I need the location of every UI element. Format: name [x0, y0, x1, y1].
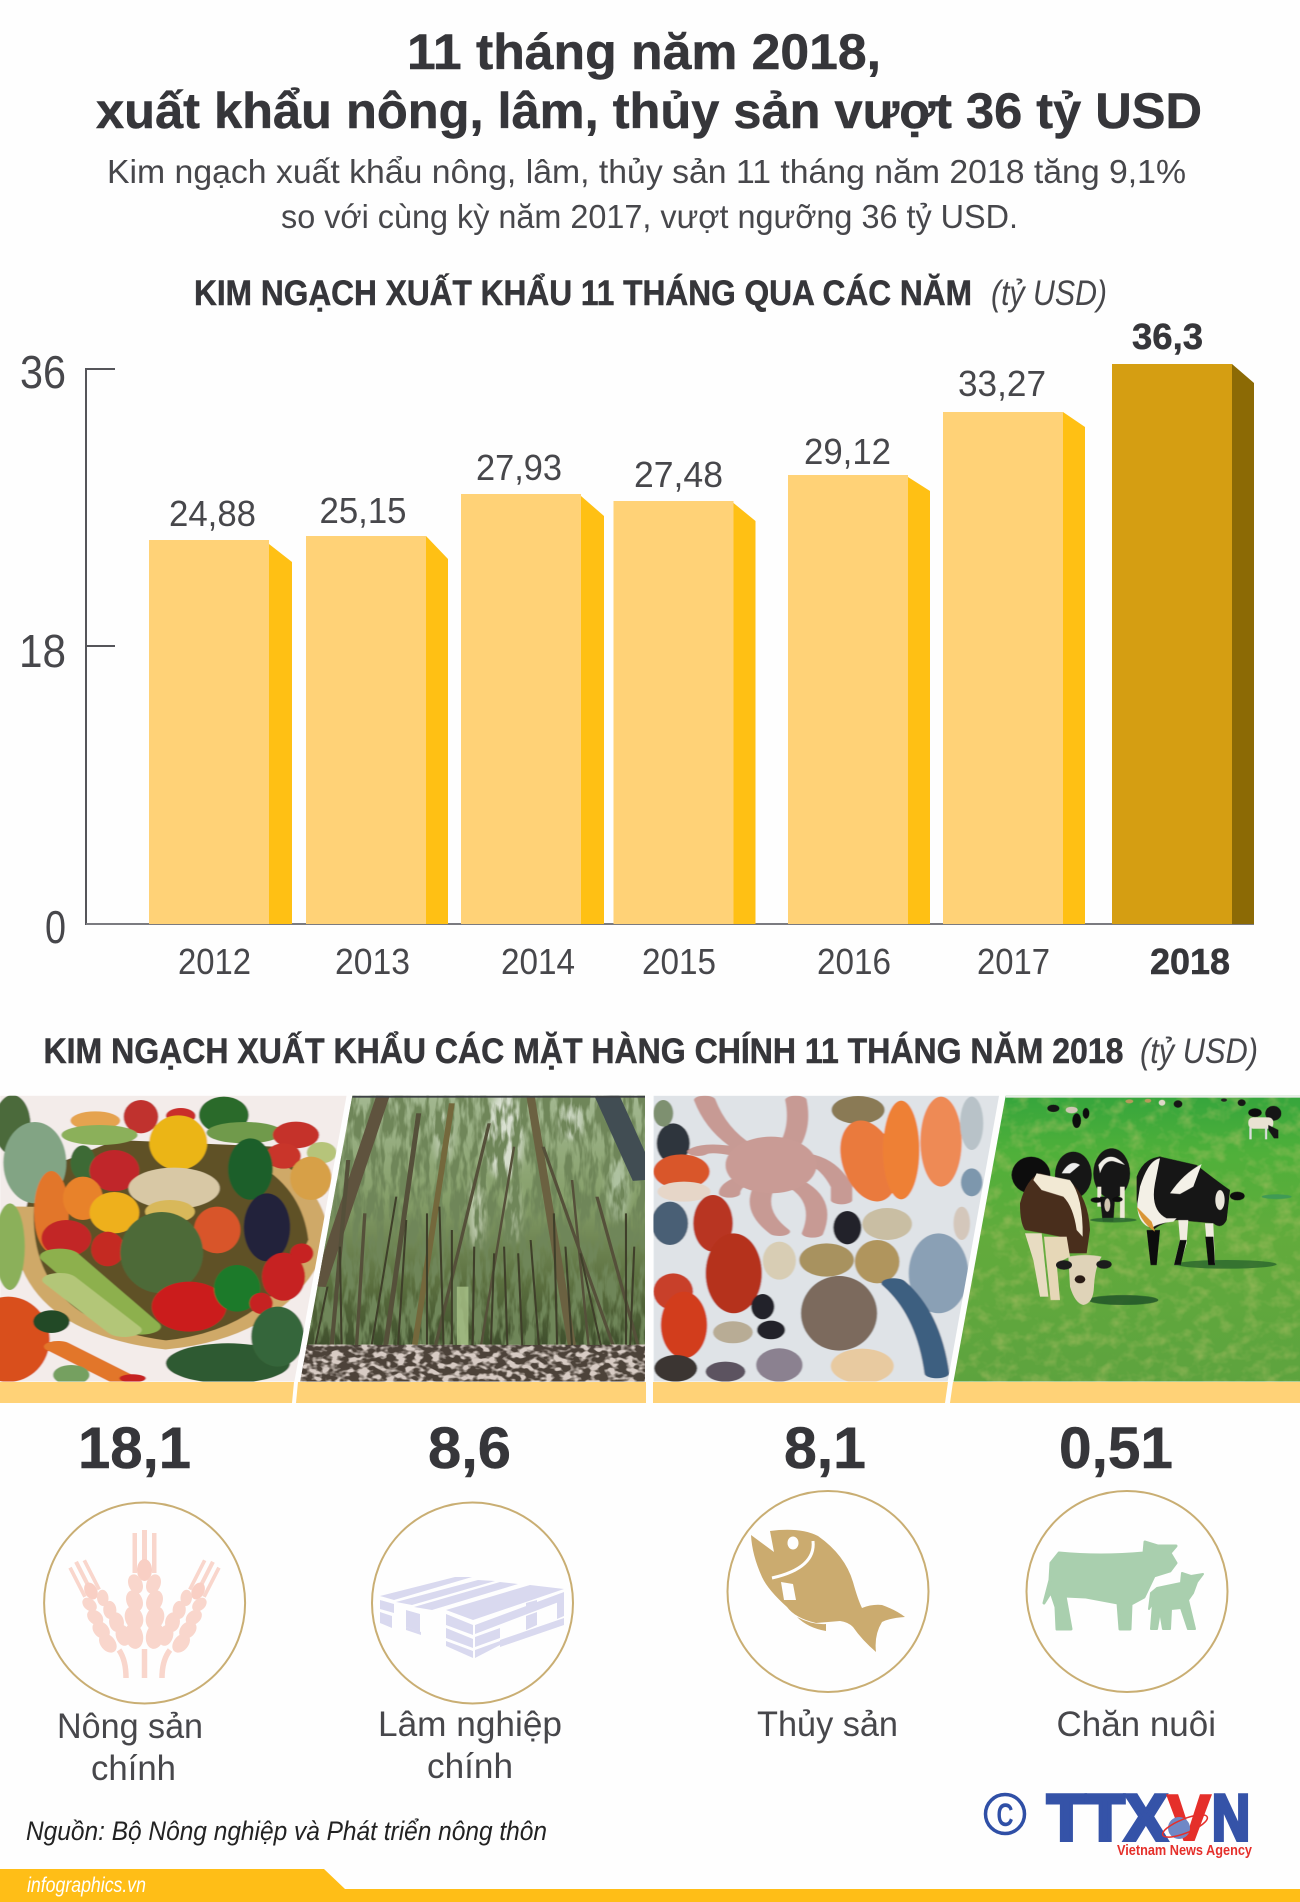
y axis with ticks and labels: 18: [19, 625, 66, 677]
bar 2016: 2016: [817, 941, 891, 982]
value: 8,6: 8,6: [428, 1416, 511, 1481]
subtitle: Kim ngạch xuất khẩu nông, lâm, thủy sản 11 tháng năm 2018 tăng 9,1%: [107, 153, 1186, 190]
y axis with ticks and labels: [19, 346, 115, 953]
yellow band under photos: [0, 1382, 1300, 1403]
value: 18,1: 18,1: [78, 1416, 191, 1481]
label: [378, 1705, 562, 1786]
label: Chăn nuôi: [1056, 1705, 1216, 1744]
column: agriculture: [44, 1416, 245, 1788]
bar 2013: 25,15: [320, 490, 406, 531]
bar 2012: 2012: [178, 941, 251, 982]
footer bar: [0, 1869, 1300, 1902]
value: 0,51: 0,51: [1059, 1416, 1173, 1481]
logo: TTXVN: TTX: [1047, 1781, 1167, 1854]
bar 2014: [461, 447, 604, 982]
footer bar: infographics.vn: [27, 1874, 146, 1897]
cow: brown and white, front: [1020, 1173, 1090, 1253]
bar 2014: 2014: [501, 941, 575, 982]
title: xuất khẩu nông, lâm, thủy sản vượt 36 tỷ USD: [96, 83, 1202, 139]
cow: black and white, middle: [1093, 1148, 1130, 1198]
bar 2018: 2018: [1150, 941, 1230, 982]
cow: big black and white: [1137, 1157, 1230, 1230]
y axis with ticks and labels: 36: [20, 346, 66, 398]
copyright mark: [986, 1794, 1024, 1834]
bar 2013: 2013: [335, 941, 410, 982]
column: livestock: [1026, 1416, 1228, 1744]
bar 2015: 2015: [642, 941, 716, 982]
heading: main export commodities: (tỷ USD): [1140, 1032, 1258, 1071]
subtitle: so với cùng kỳ năm 2017, vượt ngưỡng 36 tỷ USD.: [281, 198, 1018, 235]
icon: wheat in circle: [44, 1502, 245, 1704]
title: 11 tháng năm 2018,: [407, 24, 881, 80]
photo: forest: [298, 1093, 647, 1382]
photo: basket of vegetables: [0, 1095, 357, 1385]
label: [57, 1707, 203, 1788]
icon: fish in circle: [728, 1491, 928, 1692]
bar 2012: [149, 493, 292, 982]
far cows: [1047, 1105, 1059, 1112]
photo: cows on grass: [945, 1096, 1300, 1382]
bar chart: export value 2012-2018: [19, 316, 1254, 982]
bar 2017: [943, 363, 1085, 982]
bar 2018: [1112, 316, 1254, 982]
logo: TTXVN: V: [1167, 1781, 1211, 1854]
photo strip: [0, 1093, 1300, 1403]
heading: yearly export chart: (tỷ USD): [991, 274, 1107, 313]
photo: seafood on ice: [652, 1096, 1002, 1383]
bar 2017: 33,27: [958, 363, 1046, 404]
label: Lâm nghiệp: [378, 1705, 562, 1744]
bar 2012: 24,88: [169, 493, 256, 534]
bar 2018: 36,3: [1132, 316, 1203, 357]
bar 2017: 2017: [977, 941, 1050, 982]
label: Nông sản: [57, 1707, 203, 1746]
bar 2014: 27,93: [476, 447, 562, 488]
logo: TTXVN: N: [1212, 1781, 1250, 1854]
cows: [1012, 1098, 1292, 1305]
column: forestry: [372, 1416, 573, 1786]
icon: cow and calf in circle: [1026, 1491, 1228, 1692]
cow: black, rear: [1012, 1157, 1050, 1193]
logo: TTXVN: Vietnam News Agency: [1117, 1842, 1253, 1859]
subtitle: [107, 153, 1186, 235]
label: chính: [427, 1747, 513, 1786]
label: Thủy sản: [757, 1705, 898, 1744]
bar 2013: [306, 490, 448, 982]
y axis with ticks and labels: 0: [45, 901, 66, 953]
icon: wooden pallet in circle: [372, 1502, 573, 1704]
label: chính: [91, 1749, 176, 1788]
column: fisheries: [728, 1416, 928, 1744]
shadows: [1177, 1260, 1277, 1269]
bar 2016: 29,12: [804, 431, 891, 472]
value: 8,1: 8,1: [784, 1416, 866, 1481]
source note: Nguồn: Bộ Nông nghiệp và Phát triển nông thôn: [26, 1816, 547, 1846]
title: [96, 24, 1202, 139]
bar 2015: 27,48: [634, 454, 723, 495]
bar 2015: [614, 454, 756, 982]
logo: TTXVN: [986, 1781, 1253, 1859]
copyright mark: C: [996, 1797, 1014, 1833]
heading: yearly export chart: KIM NGẠCH XUẤT KHẨU 11 THÁNG QUA CÁC NĂM: [194, 273, 972, 313]
bar 2016: [788, 431, 930, 982]
heading: main export commodities: KIM NGẠCH XUẤT KHẨU CÁC MẶT HÀNG CHÍNH 11 THÁNG NĂM 2018: [44, 1031, 1124, 1071]
